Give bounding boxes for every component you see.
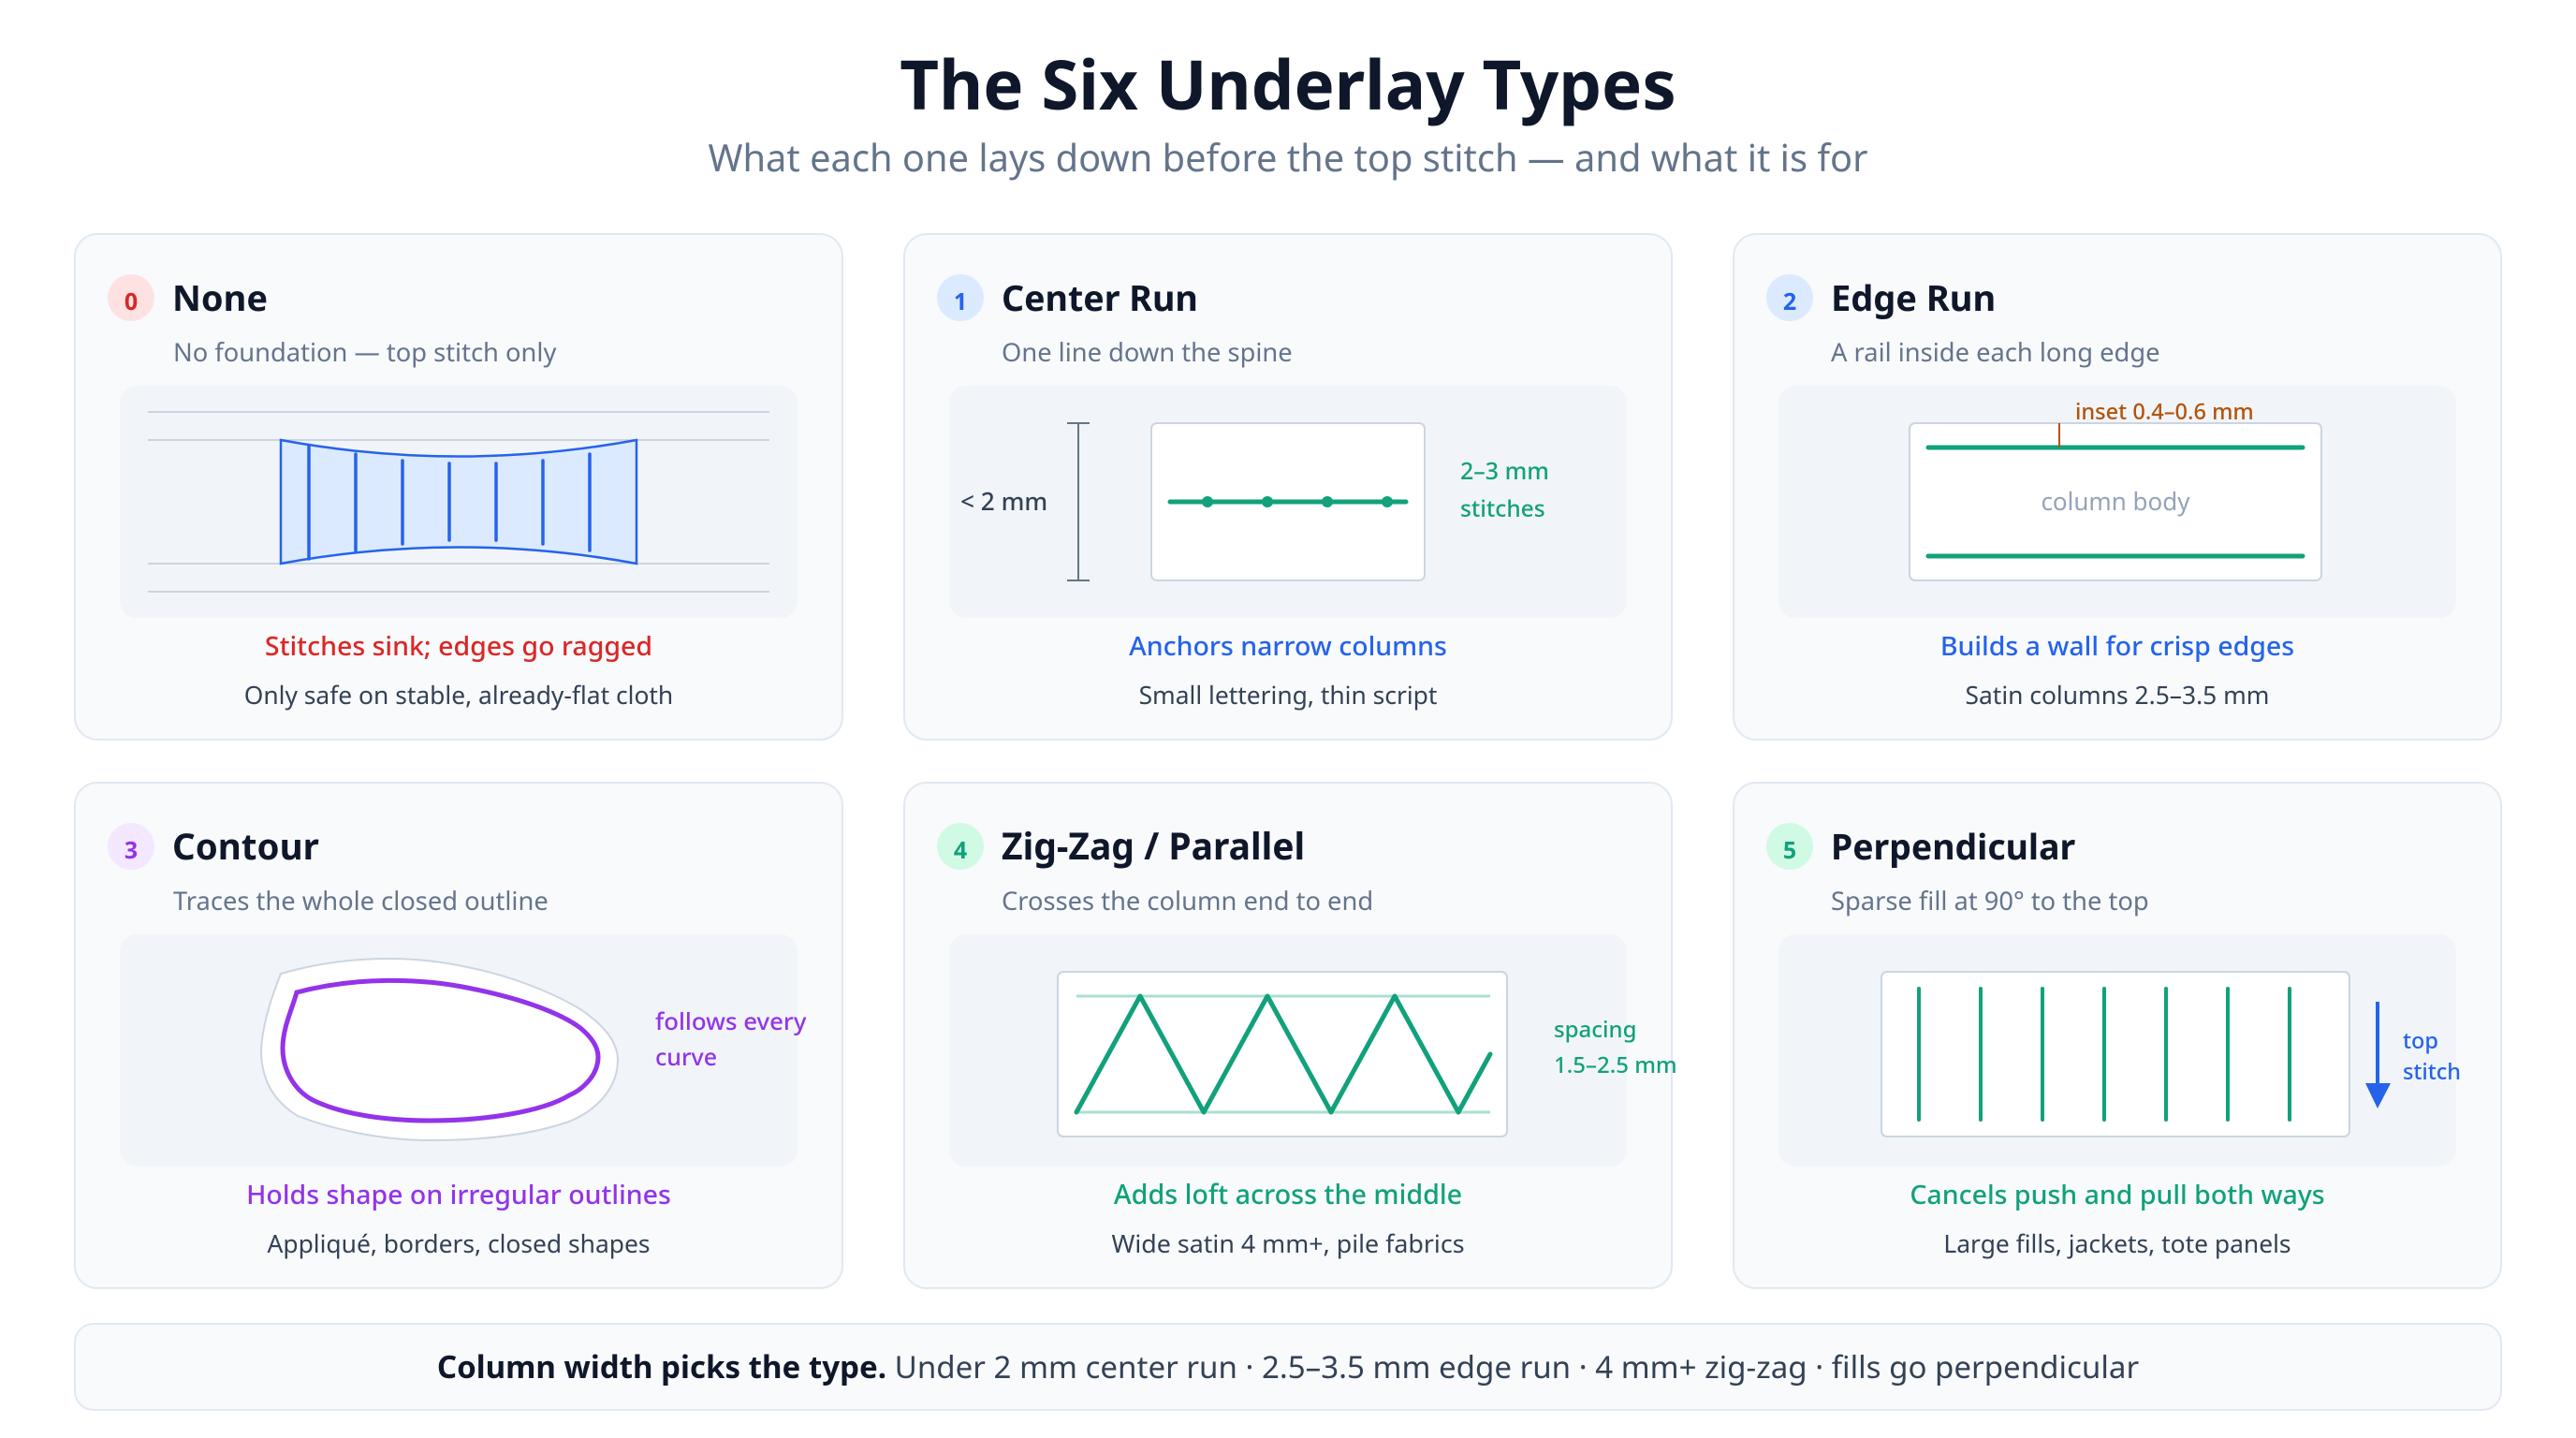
heading: Zig-Zag: Zig-Zag / Parallel bbox=[1002, 821, 1305, 871]
subheading: Center Run: One line down the spine bbox=[1002, 334, 1293, 369]
panel: Edge Run bbox=[1734, 234, 2501, 740]
diagram: center run: < 2 mm bbox=[960, 484, 1047, 518]
badge: 3 bbox=[108, 823, 154, 870]
subtitle: What each one lays down before the top stitch — and what it is for bbox=[708, 131, 1868, 183]
diagram: center run bbox=[949, 386, 1627, 618]
diagram: center run: 2–3 mm bbox=[1460, 455, 1549, 487]
note: Perpendicular: Large fills, jackets, tote panels bbox=[1943, 1226, 2291, 1260]
note: Edge Run: Satin columns 2.5–3.5 mm bbox=[1966, 678, 2269, 712]
diagram: sunken stitches bbox=[120, 386, 798, 618]
panel: Perpendicular bbox=[1734, 783, 2501, 1288]
subheading: Contour: Traces the whole closed outline bbox=[173, 883, 549, 917]
diagram: zig-zag: spacing bbox=[1554, 1014, 1636, 1045]
badge: 1: 1 bbox=[954, 286, 967, 317]
diagram: contour: follows every bbox=[655, 1004, 807, 1037]
badge: 4: 4 bbox=[954, 834, 967, 866]
badge: 5 bbox=[1766, 823, 1813, 870]
diagram: contour bbox=[120, 934, 807, 1167]
badge: 0: 0 bbox=[124, 286, 138, 317]
panel: Center Run bbox=[904, 234, 1672, 740]
diagram: zig-zag bbox=[949, 934, 1677, 1167]
note: Contour: Appliqué, borders, closed shapes bbox=[267, 1226, 651, 1260]
panel: Contour bbox=[75, 783, 842, 1288]
subheading: None: No foundation — top stitch only bbox=[173, 334, 556, 369]
badge: 3: 3 bbox=[124, 834, 138, 866]
outcome: Zig-Zag: Adds loft across the middle bbox=[1114, 1176, 1462, 1212]
diagram: zig-zag: 1.5–2.5 mm bbox=[1554, 1049, 1677, 1080]
diagram: edge run: inset 0.4–0.6 mm bbox=[2075, 396, 2254, 426]
diagram: perpendicular bbox=[1778, 934, 2461, 1167]
heading: Edge Run: Edge Run bbox=[1831, 273, 1996, 322]
subheading: Perpendicular: Sparse fill at 90° to the top bbox=[1831, 883, 2149, 917]
badge: 1 bbox=[937, 274, 984, 321]
outcome: Perpendicular: Cancels push and pull both ways bbox=[1910, 1177, 2325, 1212]
diagram: center run: stitches bbox=[1460, 493, 1545, 524]
note: None: Only safe on stable, already-flat cloth bbox=[244, 678, 673, 712]
note: Zig-Zag: Wide satin 4 mm+, pile fabrics bbox=[1111, 1225, 1465, 1260]
outcome: Center Run: Anchors narrow columns bbox=[1129, 628, 1447, 664]
panel: None bbox=[75, 234, 842, 740]
badge: 0 bbox=[108, 274, 154, 321]
footer summary: Column width picks the type. Under 2 mm center run · 2.5–3.5 mm edge run · 4 mm+ zig-zag · fills go perpendicular bbox=[437, 1345, 2139, 1387]
diagram: edge run bbox=[1778, 386, 2456, 618]
diagram: contour: curve bbox=[655, 1041, 717, 1073]
diagram: perpendicular: top bbox=[2403, 1025, 2438, 1055]
badge: 2: 2 bbox=[1783, 286, 1796, 317]
badge: 5: 5 bbox=[1783, 834, 1796, 866]
note: Center Run: Small lettering, thin script bbox=[1139, 678, 1437, 712]
badge: 4 bbox=[937, 823, 984, 870]
heading: None: None bbox=[172, 273, 268, 322]
diagram: perpendicular: stitch bbox=[2403, 1056, 2461, 1086]
panel: Zig-Zag bbox=[904, 783, 1677, 1288]
subheading: Zig-Zag: Crosses the column end to end bbox=[1002, 883, 1373, 917]
heading: Contour: Contour bbox=[172, 822, 319, 871]
heading: Perpendicular: Perpendicular bbox=[1831, 822, 2075, 870]
subheading: Edge Run: A rail inside each long edge bbox=[1831, 334, 2160, 369]
heading: Center Run: Center Run bbox=[1002, 274, 1198, 322]
outcome: None: Stitches sink; edges go ragged bbox=[265, 628, 652, 664]
title: The Six Underlay Types bbox=[900, 37, 1676, 130]
badge: 2 bbox=[1766, 274, 1813, 321]
outcome: Contour: Holds shape on irregular outlines bbox=[246, 1177, 671, 1212]
footer summary bbox=[75, 1324, 2501, 1410]
diagram: edge run: column body bbox=[2041, 484, 2190, 518]
outcome: Edge Run: Builds a wall for crisp edges bbox=[1940, 628, 2294, 664]
